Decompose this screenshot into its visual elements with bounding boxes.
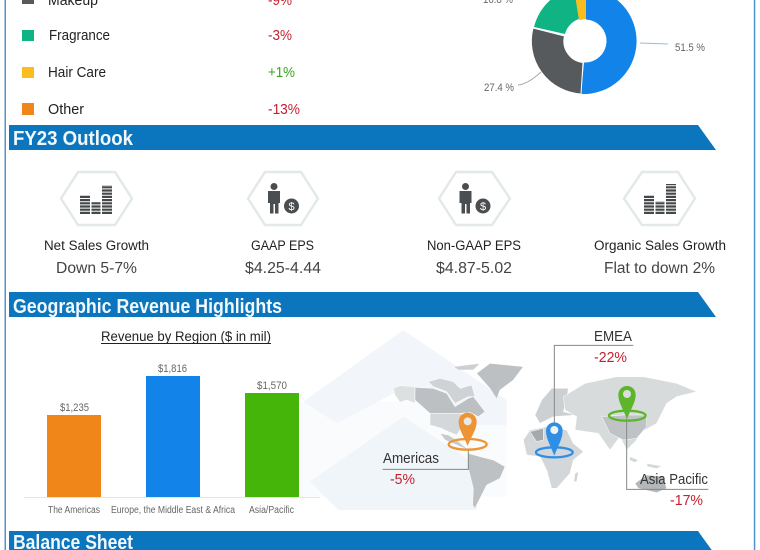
- bar: Asia/Pacific: [245, 380, 299, 516]
- heading: Geographic Revenue Highlights: [9, 292, 716, 318]
- bar: The Americas: [47, 402, 101, 516]
- callout: EMEA: -22%: [594, 350, 627, 366]
- heading: FY23 Outlook: FY23 Outlook: [13, 128, 134, 150]
- heading: Balance Sheet: [9, 531, 716, 550]
- panel: outlook metric GAAP EPS: $: [288, 201, 295, 213]
- panel: outlook metric GAAP EPS: GAAP EPS: [251, 238, 314, 253]
- callout: EMEA: [594, 329, 632, 366]
- bar: The Americas: The Americas: [48, 505, 100, 516]
- legend row: Hair Care: [22, 65, 295, 81]
- callout: Asia Pacific: [640, 472, 708, 509]
- legend row: Fragrance: -3%: [268, 28, 292, 44]
- callout lines: [383, 345, 708, 489]
- heading: FY23 Outlook: [9, 125, 716, 150]
- bar: Asia/Pacific: Asia/Pacific: [249, 505, 294, 516]
- chart title: Revenue by Region ($ in mil): [101, 329, 271, 344]
- legend row: Fragrance: [22, 28, 292, 44]
- panel: outlook metric Net Sales Growth: Down 5-7%: [56, 260, 137, 277]
- watermark: chevrons: [300, 330, 507, 510]
- legend row: Fragrance: Fragrance: [49, 28, 110, 44]
- panel: outlook metric Organic Sales Growth: [594, 172, 726, 277]
- callout: Asia Pacific: -17%: [670, 493, 703, 509]
- icon: green location pin: [609, 386, 646, 421]
- map: Americas: [393, 363, 523, 508]
- donut chart: category revenue mix: 27.4 %: [484, 82, 514, 94]
- legend row: Hair Care: +1%: [268, 65, 295, 81]
- callout: EMEA: EMEA: [594, 329, 632, 345]
- bar: Europe, the Middle East and Africa: $1,816: [158, 363, 187, 375]
- legend row: Other: Other: [48, 102, 84, 118]
- callout: Asia Pacific: Asia Pacific: [640, 472, 708, 488]
- icon: blue location pin: [536, 422, 573, 457]
- bar: Asia/Pacific: $1,570: [257, 380, 287, 392]
- bar: Europe, the Middle East and Africa: Europe, the Middle East & Africa: [111, 505, 235, 516]
- bar: The Americas: $1,235: [60, 402, 89, 414]
- panel: outlook metric Organic Sales Growth: Organic Sales Growth: [594, 238, 726, 253]
- callout: Americas: Americas: [383, 451, 439, 467]
- panel: outlook metric Net Sales Growth: [44, 172, 149, 277]
- legend row: Other: [22, 102, 300, 118]
- panel: outlook metric Net Sales Growth: Net Sales Growth: [44, 238, 149, 253]
- icon: orange location pin: [449, 413, 487, 450]
- panel: outlook metric Organic Sales Growth: Flat to down 2%: [604, 260, 715, 277]
- panel: outlook metric GAAP EPS: $4.25-4.44: [245, 260, 321, 277]
- map: Europe, Africa, Asia and Australia: [523, 377, 697, 493]
- donut chart: category revenue mix: [483, 0, 705, 94]
- legend row: Makeup: [22, 0, 292, 9]
- heading: Geographic Revenue Highlights: Geographic Revenue Highlights: [13, 296, 282, 318]
- panel: outlook metric GAAP EPS: [245, 172, 321, 277]
- bar chart: Revenue by Region: [24, 329, 320, 516]
- panel: outlook metric Non-GAAP EPS: [427, 172, 521, 277]
- panel: outlook metric Non-GAAP EPS: $4.87-5.02: [436, 260, 512, 277]
- legend row: Other: -13%: [268, 102, 300, 118]
- bar: Europe, the Middle East and Africa: [111, 363, 235, 516]
- panel: world map with regional revenue change: [300, 329, 708, 510]
- callout: Americas: [383, 451, 439, 488]
- callout: Americas: -5%: [390, 472, 415, 488]
- panel: outlook metric Non-GAAP EPS: Non-GAAP EPS: [427, 238, 521, 253]
- donut chart: category revenue mix: 51.5 %: [675, 42, 705, 54]
- panel: category sales legend: [22, 0, 300, 118]
- panel: outlook metric Non-GAAP EPS: $: [480, 201, 486, 213]
- legend row: Hair Care: Hair Care: [48, 65, 106, 81]
